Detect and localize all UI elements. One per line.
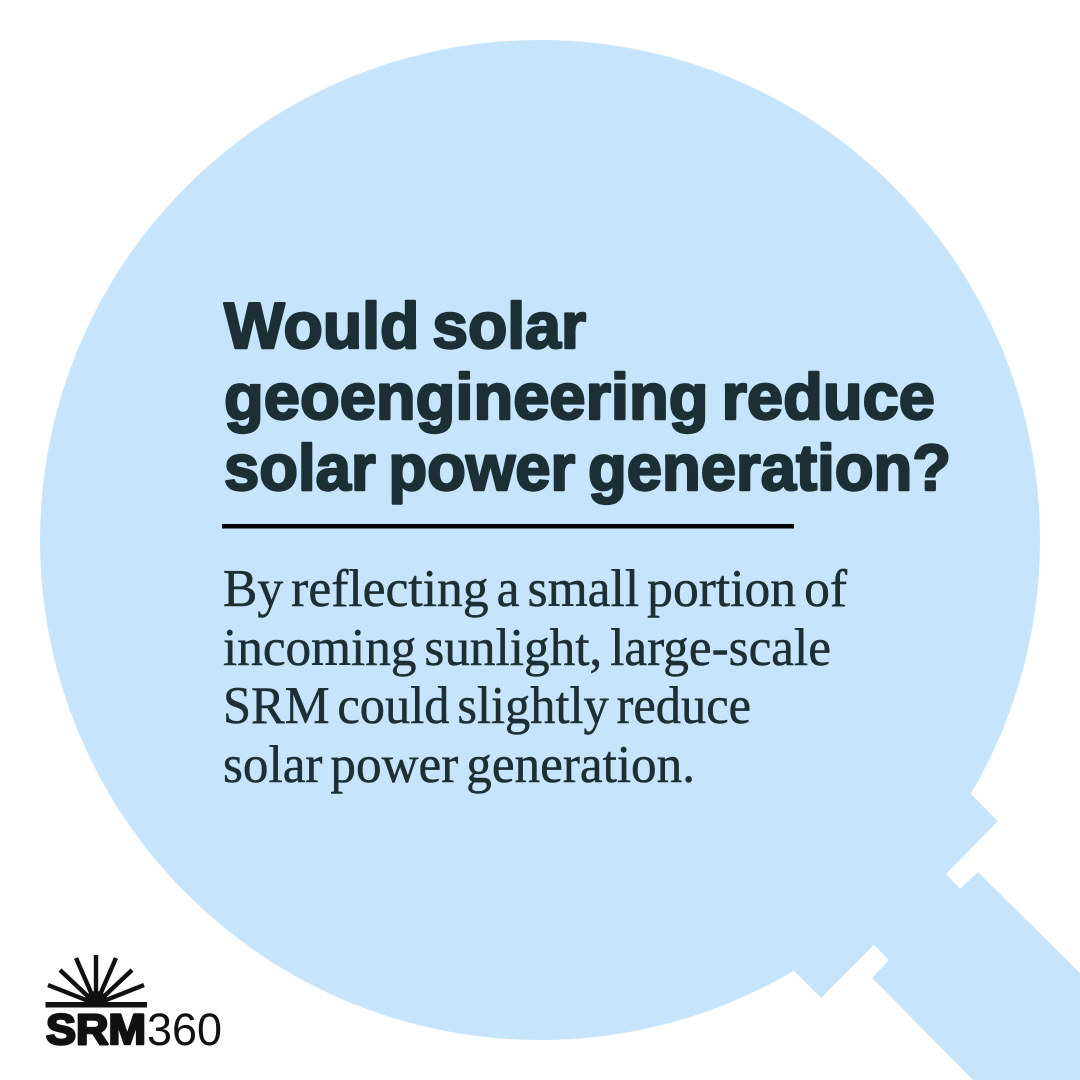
body text: SRM could slightly reduce	[223, 677, 751, 735]
body text	[223, 560, 847, 794]
logo: SRM360	[46, 955, 222, 1055]
title	[224, 289, 951, 504]
body text: By reflecting a small portion of	[223, 560, 847, 618]
logo wordmark	[46, 1004, 222, 1055]
title: Would solar	[224, 289, 586, 362]
body text: incoming sunlight, large-scale	[223, 619, 831, 677]
divider rule	[222, 524, 794, 528]
title: solar power generation?	[224, 431, 951, 504]
icon: sun rays	[46, 955, 147, 1008]
logo wordmark: SRM	[46, 1006, 146, 1054]
body text: solar power generation.	[223, 736, 695, 794]
logo wordmark: 360	[147, 1004, 222, 1055]
title: geoengineering reduce	[224, 360, 935, 433]
